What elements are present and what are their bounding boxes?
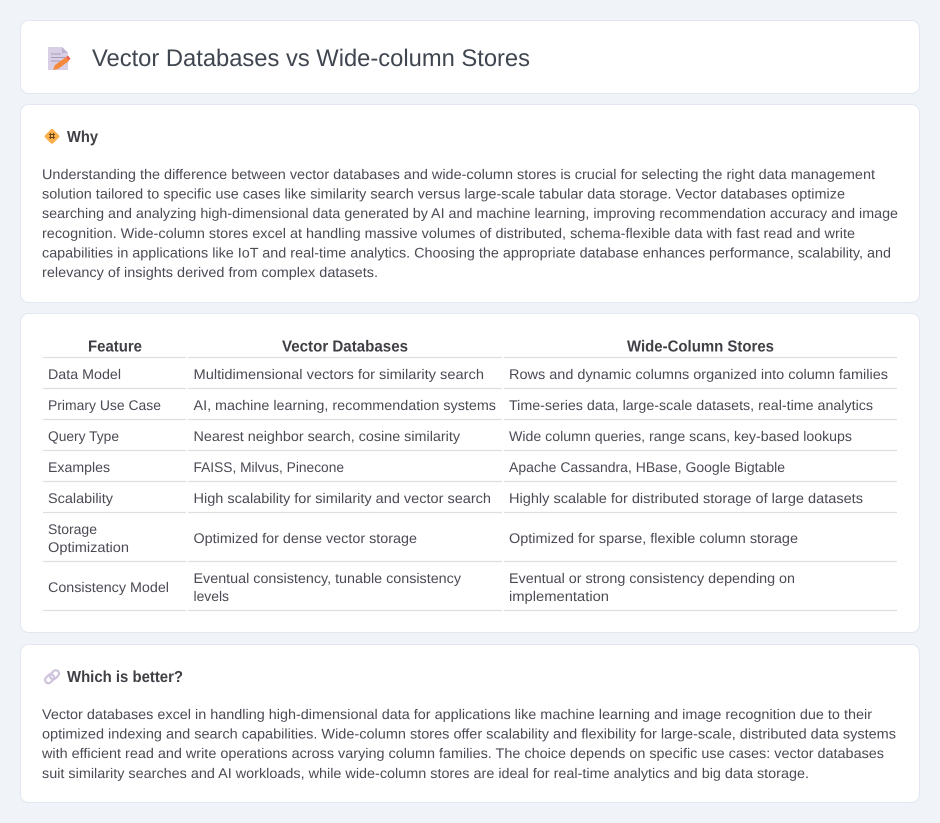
- icon: link: [44, 669, 60, 685]
- text block: which paragraph: with efficient read and write operations across varying column families. The choice depends on specific use cases: vector databases: [41, 745, 884, 761]
- text block: why paragraph: [42, 166, 898, 280]
- row: examples: Apache Cassandra, HBase, Google Bigtable: [509, 459, 785, 475]
- text block: why paragraph: searching and analyzing high-dimensional data generated by AI and machine learning, improving recommendation accuracy and image: [42, 205, 898, 221]
- row: primary use case: [48, 397, 873, 413]
- text block: which paragraph: [41, 706, 896, 781]
- row: data model: Multidimensional vectors for similarity search: [194, 366, 484, 382]
- row: consistency model: Eventual consistency, tunable consistency: [194, 570, 461, 586]
- row: storage optimization: Storage: [48, 521, 97, 537]
- row: data model: Rows and dynamic columns organized into column families: [509, 366, 888, 382]
- row: examples: FAISS, Milvus, Pinecone: [194, 459, 344, 475]
- row: consistency model: [48, 570, 795, 604]
- panel: why: [20, 104, 920, 302]
- heading: why: Why: [67, 129, 98, 146]
- table header: [88, 338, 774, 356]
- row: scalability: [48, 490, 863, 506]
- text block: which paragraph: suit similarity searches and AI workloads, while wide-column stores are ideal for real-time analytics and big data storage.: [42, 765, 809, 781]
- row: query type: Query Type: [48, 428, 119, 444]
- text block: why paragraph: solution tailored to specific use cases like similarity search versus large-scale tabular data storage. Vector databases optimize: [42, 186, 845, 202]
- row: query type: Nearest neighbor search, cosine similarity: [194, 428, 460, 444]
- row: primary use case: Time-series data, large-scale datasets, real-time analytics: [509, 397, 873, 413]
- text block: why paragraph: Understanding the difference between vector databases and wide-column stores is crucial for selecting the right data management: [42, 166, 875, 182]
- panel: which is better: [20, 644, 920, 802]
- row: scalability: High scalability for similarity and vector search: [194, 490, 491, 506]
- row: query type: Wide column queries, range scans, key-based lookups: [509, 428, 852, 444]
- row: storage optimization: Optimization: [48, 539, 129, 555]
- row: storage optimization: [48, 521, 798, 555]
- row: examples: Examples: [48, 459, 110, 475]
- panel: header: [20, 20, 920, 94]
- table header: Wide-Column Stores: [627, 338, 774, 356]
- heading: which is better: Which is better?: [67, 669, 183, 686]
- text block: which paragraph: optimized indexing and search capabilities. Wide-column stores offer scalability and flexibility for large-scale, distributed data systems: [42, 726, 896, 742]
- text block: why paragraph: relevancy of insights derived from complex datasets.: [42, 264, 378, 280]
- table header: Feature: [88, 338, 142, 356]
- row: scalability: Scalability: [48, 490, 113, 506]
- title: Vector Databases vs Wide-column Stores: [92, 45, 530, 72]
- row: consistency model: Eventual or strong consistency depending on: [509, 570, 795, 586]
- row: consistency model: implementation: [509, 588, 609, 604]
- icon: notepad with pencil: [48, 47, 70, 70]
- row: data model: Data Model: [48, 366, 121, 382]
- row: scalability: Highly scalable for distributed storage of large datasets: [509, 490, 863, 506]
- row: data model: [48, 366, 888, 382]
- table header: Vector Databases: [282, 338, 408, 356]
- icon: orange diamond: [44, 128, 60, 144]
- text block: why paragraph: capabilities in applications like IoT and real-time analytics. Choosing the appropriate database enhances performance, scalability, and: [42, 244, 891, 260]
- text block: why paragraph: recognition. Wide-column stores excel at handling massive volumes of distributed, schema-flexible data with fast read and write: [42, 225, 855, 241]
- row: primary use case: Primary Use Case: [48, 397, 161, 413]
- row: consistency model: levels: [194, 588, 229, 604]
- row: primary use case: AI, machine learning, recommendation systems: [194, 397, 496, 413]
- row: storage optimization: Optimized for sparse, flexible column storage: [509, 530, 798, 546]
- row: storage optimization: Optimized for dense vector storage: [194, 530, 417, 546]
- row: consistency model: Consistency Model: [48, 579, 169, 595]
- row: query type: [48, 428, 852, 444]
- row: examples: [48, 459, 785, 475]
- text block: which paragraph: Vector databases excel in handling high-dimensional data for applications like machine learning and image recognition due to their: [42, 706, 872, 722]
- panel: comparison table: [20, 314, 920, 632]
